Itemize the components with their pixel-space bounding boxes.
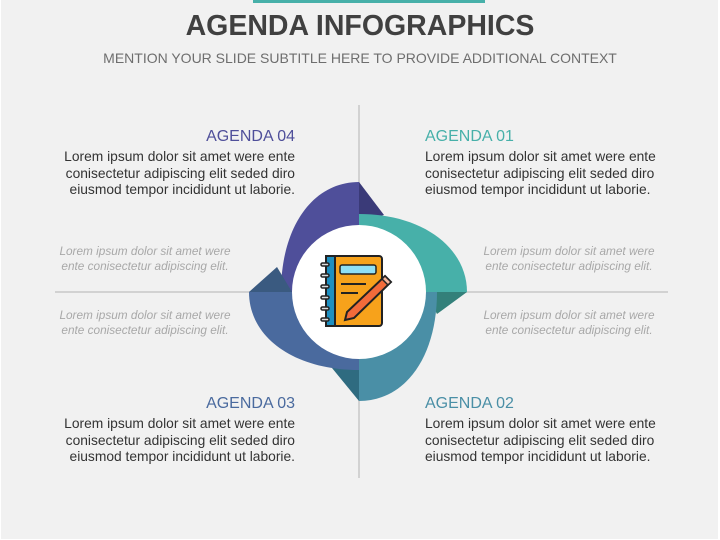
title: AGENDA INFOGRAPHICS: [186, 10, 534, 42]
side note left top: Lorem ipsum dolor sit amet were ente conisectetur adipiscing elit.: [59, 244, 231, 273]
panel: agenda 02: AGENDA 02: [425, 395, 514, 412]
segment: agenda 02 blue-teal: [332, 292, 437, 401]
panel: agenda 04: AGENDA 04: [206, 128, 295, 145]
panel: agenda 02: [425, 395, 656, 464]
segment: agenda 03 blue: [249, 267, 359, 370]
panel: agenda 04: [64, 128, 295, 197]
panel: agenda 03: Lorem ipsum dolor sit amet were ente conisectetur adipiscing elit seded diro eiusmod tempor incididunt ut laborie.: [64, 416, 295, 464]
side note left bottom: Lorem ipsum dolor sit amet were ente conisectetur adipiscing elit.: [59, 308, 231, 337]
side note right top: Lorem ipsum dolor sit amet were ente conisectetur adipiscing elit.: [483, 244, 655, 273]
side note right bottom: Lorem ipsum dolor sit amet were ente conisectetur adipiscing elit.: [483, 308, 655, 337]
panel: agenda 01: Lorem ipsum dolor sit amet were ente conisectetur adipiscing elit seded diro eiusmod tempor incididunt ut laborie.: [425, 149, 656, 197]
panel: agenda 01: [425, 128, 656, 197]
icon: notebook with pencil: [321, 256, 391, 326]
panel: agenda 03: [64, 395, 295, 464]
subtitle: MENTION YOUR SLIDE SUBTITLE HERE TO PROVIDE ADDITIONAL CONTEXT: [103, 50, 617, 66]
segment: agenda 01 teal: [359, 214, 467, 314]
panel: agenda 03: AGENDA 03: [206, 395, 295, 412]
panel: agenda 01: AGENDA 01: [425, 128, 514, 145]
segment: agenda 04 purple: [281, 182, 384, 292]
top accent bar: [253, 0, 485, 3]
panel: agenda 04: Lorem ipsum dolor sit amet were ente conisectetur adipiscing elit seded diro eiusmod tempor incididunt ut laborie.: [64, 149, 295, 197]
panel: agenda 02: Lorem ipsum dolor sit amet were ente conisectetur adipiscing elit seded diro eiusmod tempor incididunt ut laborie.: [425, 416, 656, 464]
